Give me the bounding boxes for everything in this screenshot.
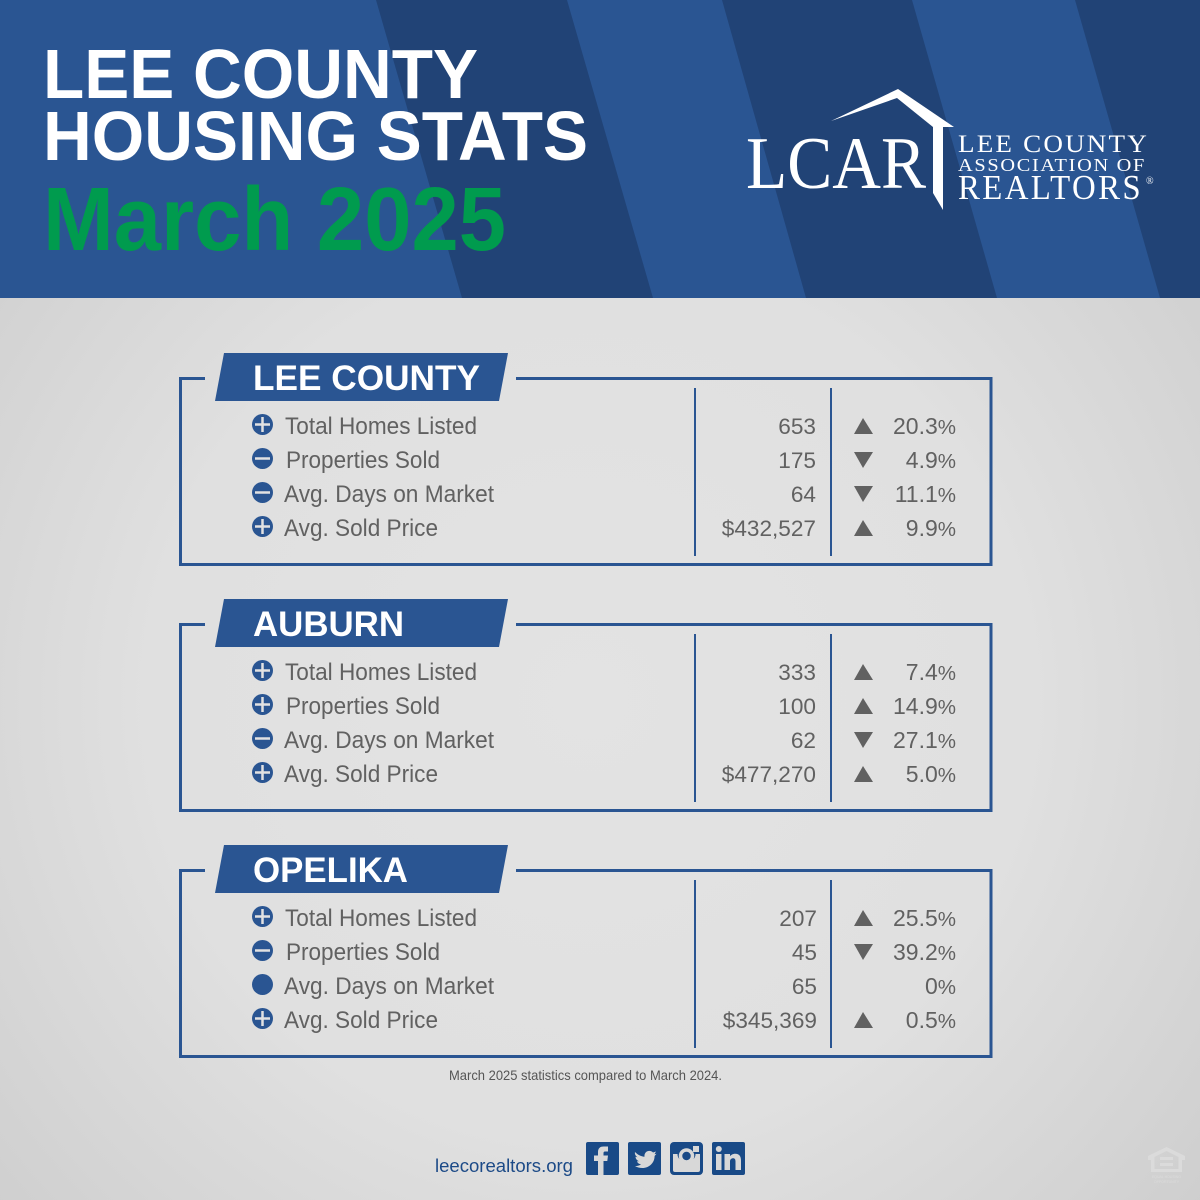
heading: Auburn: AUBURN [253, 605, 404, 644]
percent changes [893, 905, 956, 1033]
trend icons [252, 906, 273, 1029]
logo: LCAR: LEE COUNTY [958, 131, 1149, 158]
heading: Lee County [215, 353, 508, 401]
panel: Lee County [180, 353, 991, 564]
values: 207 [779, 906, 817, 931]
row labels: Avg. Sold Price [284, 515, 438, 542]
panel: Opelika [180, 845, 991, 1056]
title [43, 35, 588, 175]
footnote: March 2025 statistics compared to March 2024. [449, 1067, 722, 1083]
icon: twitter [628, 1142, 661, 1175]
percent changes [893, 413, 956, 541]
values: $477,270 [722, 762, 816, 787]
row labels: Avg. Days on Market [284, 727, 494, 754]
row labels: Properties Sold [286, 447, 440, 474]
logo: LCAR: LCAR [746, 123, 927, 205]
row labels [284, 659, 494, 788]
row labels: Properties Sold [286, 939, 440, 966]
change arrows [854, 418, 873, 536]
heading: Lee County: LEE COUNTY [253, 359, 480, 398]
heading: Opelika: OPELIKA [253, 851, 408, 890]
percent changes: 11.1% [895, 481, 956, 507]
row labels: Total Homes Listed [285, 413, 477, 440]
values: 175 [778, 448, 816, 473]
row labels: Total Homes Listed [285, 659, 477, 686]
row labels [284, 413, 494, 542]
percent changes [893, 659, 956, 787]
values: $432,527 [722, 516, 816, 541]
row labels: Avg. Days on Market [284, 481, 494, 508]
values [722, 660, 816, 787]
percent changes: 27.1% [893, 727, 956, 753]
values: 653 [778, 414, 816, 439]
title: HOUSING STATS [43, 97, 588, 175]
percent changes: 9.9% [906, 515, 956, 541]
values: 45 [792, 940, 817, 965]
icon: equal housing opportunity: OPPORTUNITY [1154, 1180, 1180, 1184]
change arrows [854, 910, 873, 1028]
website: leecorealtors.org [435, 1156, 573, 1176]
panel: Auburn [180, 599, 991, 810]
row labels: Avg. Sold Price [284, 1007, 438, 1034]
percent changes: 39.2% [893, 939, 956, 965]
percent changes: 25.5% [893, 905, 956, 931]
icon: house roof [831, 89, 954, 210]
values: 100 [778, 694, 816, 719]
values [723, 906, 817, 1033]
values: 333 [778, 660, 816, 685]
percent changes: 4.9% [906, 447, 956, 473]
icon: equal housing opportunity: EQUAL HOUSING [1152, 1175, 1181, 1179]
values: $345,369 [723, 1008, 817, 1033]
logo: LCAR [746, 89, 1154, 210]
row labels [284, 905, 494, 1034]
logo: LCAR: ASSOCIATION OF [958, 155, 1146, 175]
values: 64 [791, 482, 816, 507]
heading: Auburn [215, 599, 508, 647]
values: 62 [791, 728, 816, 753]
row labels: Avg. Days on Market [284, 973, 494, 1000]
percent changes: 0% [925, 973, 956, 999]
percent changes: 7.4% [906, 659, 956, 685]
heading: Opelika [215, 845, 508, 893]
values: 65 [792, 974, 817, 999]
row labels: Total Homes Listed [285, 905, 477, 932]
title: LEE COUNTY [43, 35, 478, 113]
subtitle: March 2025: March 2025 [43, 170, 506, 270]
trend icons [252, 414, 273, 537]
logo: LCAR: REALTORS [958, 168, 1143, 207]
icon: linkedin [712, 1142, 745, 1175]
percent changes: 0.5% [906, 1007, 956, 1033]
icon: instagram [670, 1142, 703, 1175]
percent changes: 14.9% [893, 693, 956, 719]
logo: LCAR: ® [1146, 176, 1154, 187]
icon: facebook [586, 1142, 619, 1175]
values [722, 414, 816, 541]
percent changes: 20.3% [893, 413, 956, 439]
change arrows [854, 664, 873, 782]
row labels: Properties Sold [286, 693, 440, 720]
icon: equal housing opportunity [1148, 1147, 1185, 1184]
trend icons [252, 660, 273, 783]
header banner [0, 0, 1200, 298]
percent changes: 5.0% [906, 761, 956, 787]
row labels: Avg. Sold Price [284, 761, 438, 788]
